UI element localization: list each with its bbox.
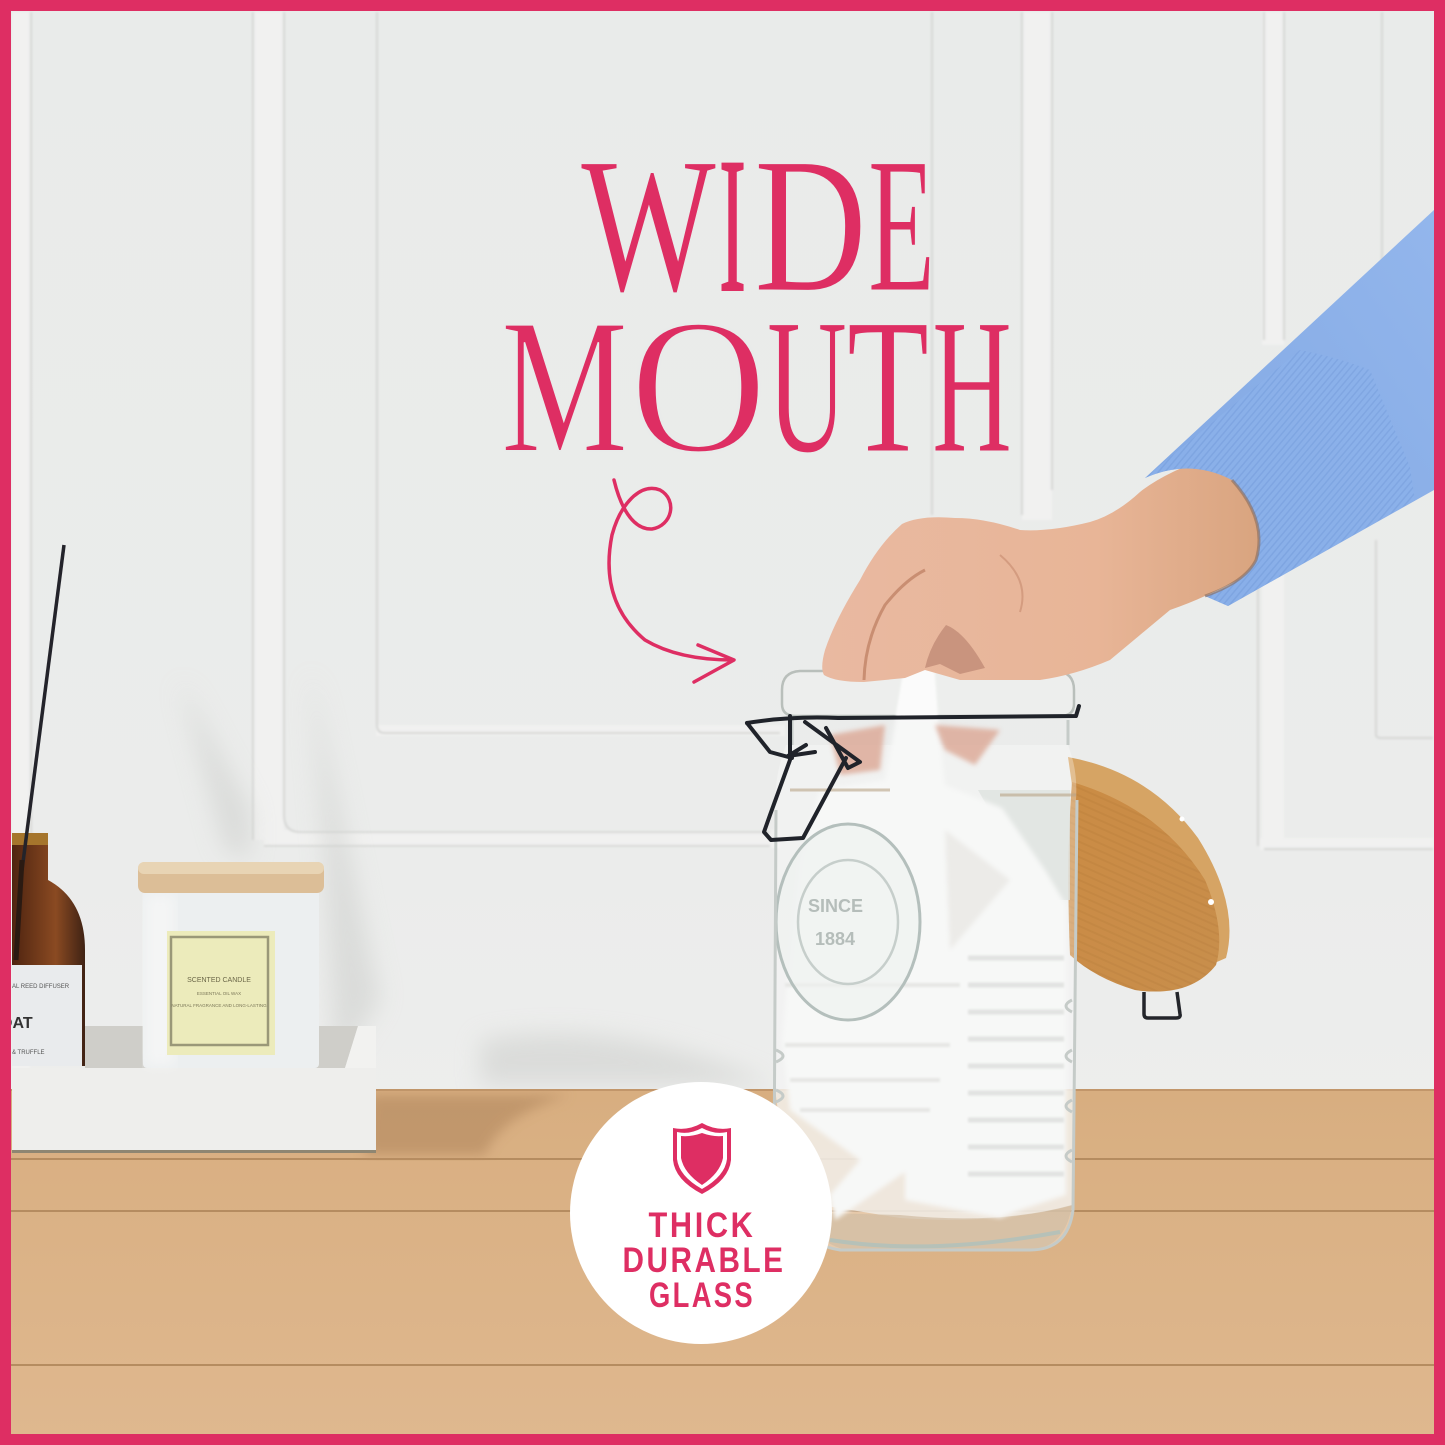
badge label [622,1206,786,1315]
title: wide mouth: D [754,118,867,332]
icon: shield [673,1123,731,1194]
candle: ESSENTIAL OIL WAX [197,991,241,996]
title: wide mouth: H [932,279,1012,493]
gap between fingers [925,625,985,674]
soft wall shadows [180,670,775,1085]
candle: NATURAL FRAGRANCE AND LONG-LASTING [171,1003,267,1008]
title: wide mouth [501,118,1012,493]
title: wide mouth: M [501,279,628,493]
title: wide mouth: O [630,279,767,493]
embossed badge: 1884 [815,929,855,949]
hand reflection in glass [830,725,1000,775]
badge: thick durable glass [570,1082,832,1344]
candle [138,862,324,1068]
title: wide mouth: I [719,118,746,332]
cotton pads [782,661,1066,1220]
diffuser bottle: OAT [0,1015,33,1032]
title: wide mouth: W [581,118,716,332]
diffuser bottle [0,545,85,1066]
embossed badge [776,824,920,1020]
title: wide mouth: E [868,118,935,332]
hand and arm [822,210,1434,682]
badge label: GLASS [649,1276,755,1315]
jar edges [774,800,1077,1250]
blue sleeve [1145,210,1434,606]
glass jar with cotton pads [774,661,1077,1250]
embossed badge: SINCE [808,896,863,916]
badge label: DURABLE [622,1241,786,1280]
title: wide mouth: U [767,279,847,493]
title: wide mouth: T [847,279,929,493]
candle: SCENTED CANDLE [187,977,251,984]
badge label: THICK [648,1206,756,1245]
curly arrow [609,480,734,682]
diffuser bottle: & TRUFFLE [12,1050,45,1056]
open bamboo lid [1068,757,1230,1018]
white tray [12,1026,376,1153]
clasp wire [747,706,1079,840]
diffuser bottle: AL REED DIFFUSER [12,984,70,990]
wall panel mouldings [12,12,1433,1089]
jar rim [782,661,1074,745]
wooden table [0,1089,1445,1445]
